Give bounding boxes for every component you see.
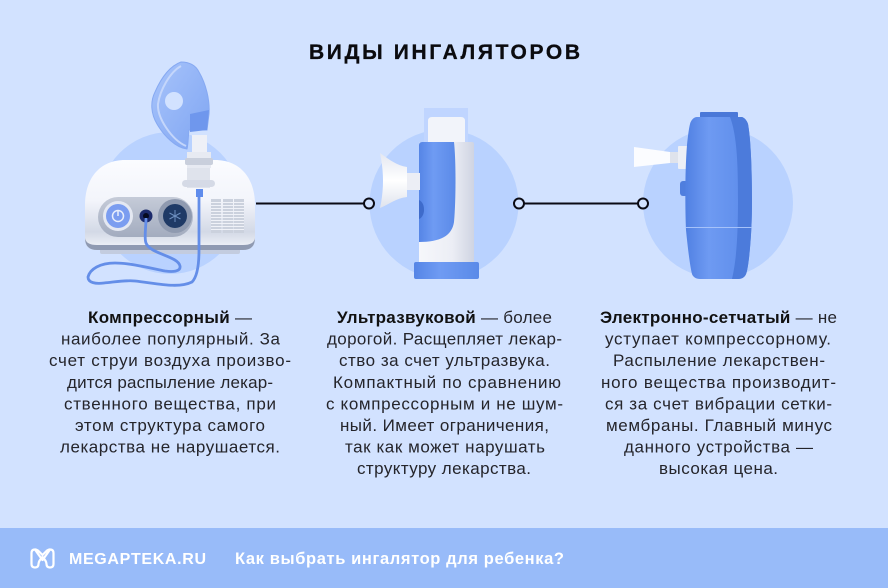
text block: compressor: этом структура самого bbox=[75, 416, 265, 435]
text block: mesh: ся за счет вибрации сетки- bbox=[605, 394, 832, 413]
text block: ultrasonic: ство за счет ультразвука. bbox=[339, 351, 550, 370]
mask bbox=[152, 62, 209, 149]
footer band bbox=[0, 528, 888, 588]
title: ВИДЫ ИНГАЛЯТОРОВ bbox=[309, 41, 580, 64]
text block: mesh: ного вещества производит- bbox=[601, 373, 836, 392]
icon: ultrasonic inhaler bbox=[370, 108, 518, 279]
text block: mesh: высокая цена. bbox=[659, 459, 778, 478]
text block: mesh: Распыление лекарствен- bbox=[613, 351, 825, 370]
text block: compressor: счет струи воздуха произво- bbox=[49, 351, 291, 370]
blue front panel bbox=[419, 142, 456, 242]
icon: compressor nebulizer bbox=[85, 62, 255, 285]
text block: ultrasonic: Компактный по сравнению bbox=[333, 373, 561, 392]
text block: compressor: Компрессорный — bbox=[88, 308, 252, 327]
text block: ultrasonic: дорогой. Расщепляет лекар- bbox=[327, 330, 562, 349]
power button bbox=[103, 201, 133, 231]
text block: mesh: мембраны. Главный минус bbox=[606, 416, 832, 435]
nozzle bbox=[634, 147, 678, 167]
text block: compressor bbox=[49, 308, 291, 457]
footer link text: Как выбрать ингалятор для ребенка? bbox=[235, 550, 564, 568]
text block: mesh: уступает компрессорному. bbox=[605, 330, 831, 349]
tube connector bbox=[192, 135, 207, 155]
text block: ultrasonic: структуру лекарства. bbox=[357, 459, 531, 478]
text block: ultrasonic: так как может нарушать bbox=[345, 438, 545, 457]
canister bbox=[428, 117, 465, 145]
text block: ultrasonic: ный. Имеет ограничения, bbox=[340, 416, 549, 435]
text block: mesh: данного устройства — bbox=[624, 438, 813, 457]
control panel bbox=[98, 197, 193, 237]
port bbox=[140, 210, 152, 222]
brand name: MEGAPTEKA.RU bbox=[69, 551, 206, 568]
connector: second device to third device bbox=[514, 198, 648, 208]
base body bbox=[100, 245, 240, 254]
text block: ultrasonic bbox=[326, 308, 563, 478]
text block: mesh bbox=[600, 308, 837, 478]
body bbox=[685, 117, 752, 279]
tubing bbox=[88, 197, 199, 285]
text block: compressor: ственного вещества, при bbox=[64, 394, 276, 413]
dial bbox=[158, 199, 192, 233]
nozzle bbox=[187, 152, 211, 168]
text block: compressor: наиболее популярный. За bbox=[61, 330, 281, 349]
text block: mesh: Электронно-сетчатый — не bbox=[600, 308, 837, 327]
icon: logo bbox=[32, 550, 54, 568]
base ring bbox=[414, 262, 479, 279]
text block: compressor: дится распыление лекар- bbox=[67, 373, 273, 392]
text block: compressor: лекарства не нарушается. bbox=[60, 438, 280, 457]
mouthpiece bbox=[407, 173, 420, 190]
icon: mesh inhaler bbox=[634, 112, 793, 279]
top cap bbox=[700, 112, 738, 120]
text block: ultrasonic: Ультразвуковой — более bbox=[337, 308, 552, 327]
text block: ultrasonic: с компрессорным и не шум- bbox=[326, 394, 563, 413]
side button bbox=[680, 181, 688, 196]
white housing bbox=[419, 142, 474, 264]
connector: first device to second device bbox=[256, 198, 374, 208]
vent grille bbox=[211, 199, 244, 233]
